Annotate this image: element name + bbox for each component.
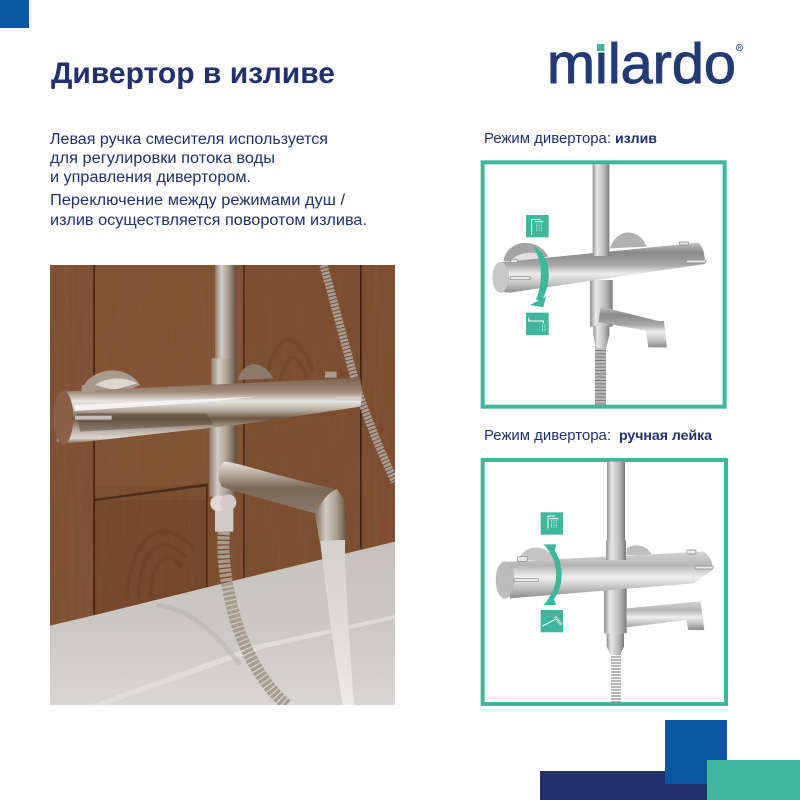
hose ridges xyxy=(584,347,617,405)
collar xyxy=(593,237,609,256)
levers xyxy=(514,550,713,582)
rod xyxy=(215,265,236,360)
text block: description: Переключение между режимами душ / xyxy=(50,192,346,209)
corner block: blue xyxy=(665,720,727,784)
thermostat body xyxy=(500,243,705,293)
label value: hand shower: ручная лейка xyxy=(619,427,712,443)
photo: faucet over bathtub xyxy=(50,265,395,705)
brackets xyxy=(82,364,274,390)
bathtub xyxy=(50,542,395,705)
rod xyxy=(593,164,609,238)
arrow: rotate down xyxy=(530,246,549,307)
hose xyxy=(601,653,631,703)
text block: description: Левая ручка смесителя используется xyxy=(50,131,328,148)
hose: right xyxy=(323,265,395,482)
lower pipe xyxy=(604,583,627,633)
thermostat body xyxy=(507,552,713,598)
wall bracket xyxy=(503,232,647,262)
rod xyxy=(607,462,625,542)
logo: milardo: milardo xyxy=(547,32,736,96)
panel frame xyxy=(483,162,725,407)
connector xyxy=(210,494,236,532)
icon: shower xyxy=(541,512,563,535)
levers xyxy=(510,242,706,280)
title: Дивертор в изливе xyxy=(51,57,335,90)
icon: spout xyxy=(526,313,549,335)
hose: lower xyxy=(223,532,287,705)
handle cap xyxy=(493,262,509,293)
tub hose shadow xyxy=(157,605,240,665)
corner square: top left xyxy=(0,0,29,28)
collar xyxy=(606,541,626,560)
panel: hand shower mode xyxy=(483,460,726,704)
thermostat body xyxy=(53,372,362,444)
text block: description: для регулировки потока воды xyxy=(50,150,275,167)
nut xyxy=(607,633,624,655)
spout xyxy=(627,602,704,630)
tub highlights xyxy=(90,615,395,705)
spout xyxy=(219,462,347,539)
corner block: navy xyxy=(540,771,710,800)
label value: spout: излив xyxy=(615,130,657,146)
handle cap xyxy=(496,562,514,598)
corner block: teal xyxy=(707,760,800,800)
lower pipe xyxy=(590,280,613,327)
spout tip xyxy=(317,489,347,541)
spout xyxy=(598,307,667,347)
water stream xyxy=(320,540,354,705)
icon: shower xyxy=(526,215,549,237)
wall bracket xyxy=(518,545,652,560)
hose xyxy=(595,347,606,405)
arrow: two-way rotate xyxy=(543,544,562,605)
label: mode spout: Режим дивертора: xyxy=(484,131,611,147)
wood wall xyxy=(50,265,395,632)
collar xyxy=(211,358,237,388)
label: mode hand shower: Режим дивертора: xyxy=(484,428,611,444)
text block: description: и управления дивертором. xyxy=(50,169,251,186)
panel frame xyxy=(483,460,726,704)
panel: spout mode xyxy=(483,162,725,407)
nut xyxy=(593,326,609,348)
icon: hand shower xyxy=(541,610,563,632)
logo: milardo: R xyxy=(738,46,742,52)
text block: description: излив осуществляется поворотом излива. xyxy=(50,212,367,229)
lower pipe xyxy=(209,422,237,497)
text block: description xyxy=(50,131,367,229)
